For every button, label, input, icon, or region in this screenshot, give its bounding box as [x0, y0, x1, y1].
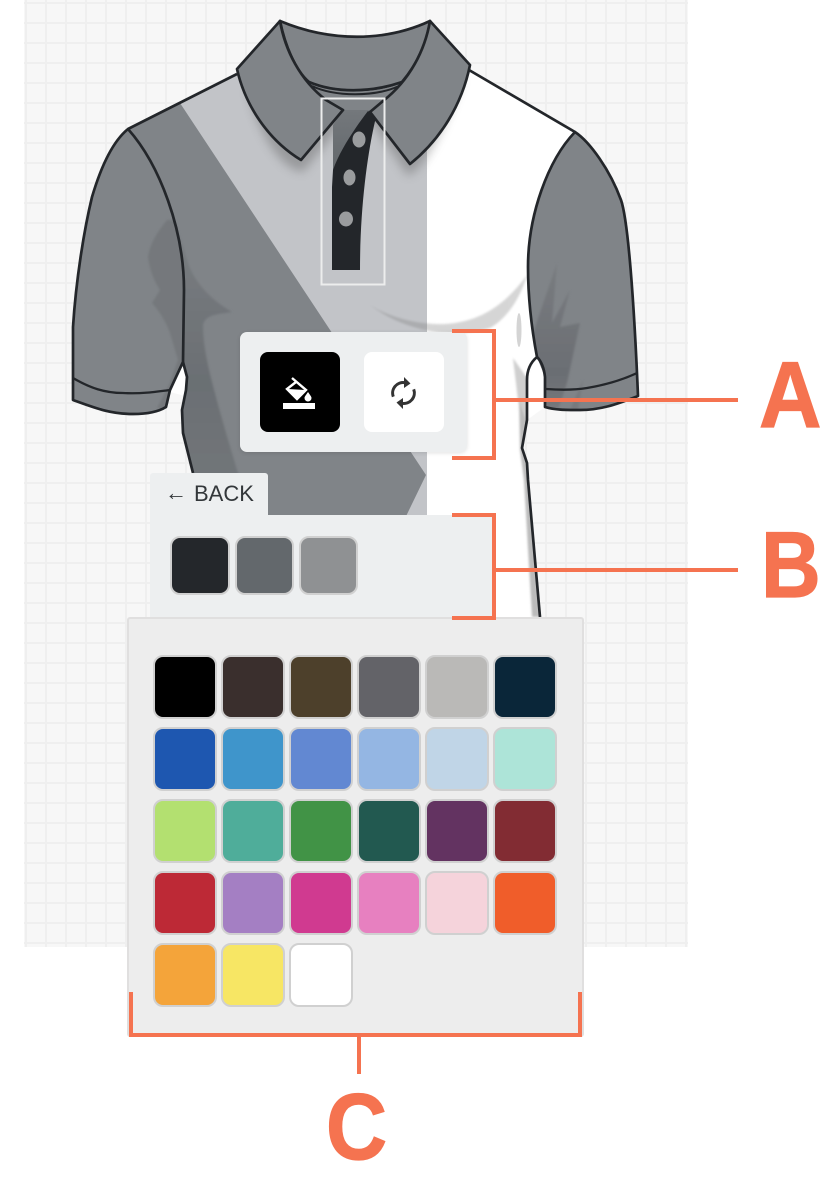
- palette row 3: [153, 799, 557, 863]
- back tab: BACK: [194, 481, 254, 506]
- bracket A: [452, 329, 738, 460]
- shirt body: [127, 69, 576, 617]
- bracket B: [452, 513, 738, 620]
- placket with buttons: [332, 110, 376, 270]
- palette row 1: [153, 655, 557, 719]
- palette row 4: [153, 871, 557, 935]
- neck interior: [309, 82, 402, 112]
- palette row 5: [153, 943, 353, 1007]
- shade swatch 2: [235, 536, 294, 595]
- panel A: tool buttons: [240, 332, 467, 452]
- right sleeve: [528, 132, 638, 410]
- shade panel background: [150, 515, 494, 620]
- panel B: shade swatches: [150, 473, 492, 617]
- shade swatch 1: [170, 536, 230, 595]
- left sleeve: [73, 129, 190, 414]
- fill tool button: [260, 352, 340, 432]
- polo shirt illustration: [72, 20, 640, 617]
- placket selection box: [322, 98, 384, 284]
- background grid: [24, 0, 688, 947]
- shade swatch 3: [299, 536, 358, 595]
- armpit gaps: [170, 357, 545, 420]
- label B: B: [761, 512, 821, 617]
- bracket C: [129, 992, 582, 1074]
- back tab: [150, 473, 268, 515]
- back tab: ←: [165, 480, 187, 505]
- panel C: colour palette: [127, 617, 584, 1037]
- collar: [237, 21, 470, 164]
- label C: C: [326, 1074, 387, 1179]
- icon: paint bucket: [283, 377, 315, 409]
- palette row 2: [153, 727, 557, 791]
- reset tool button: [364, 352, 444, 432]
- label A: A: [759, 342, 821, 447]
- icon: rotate arrows: [391, 377, 416, 409]
